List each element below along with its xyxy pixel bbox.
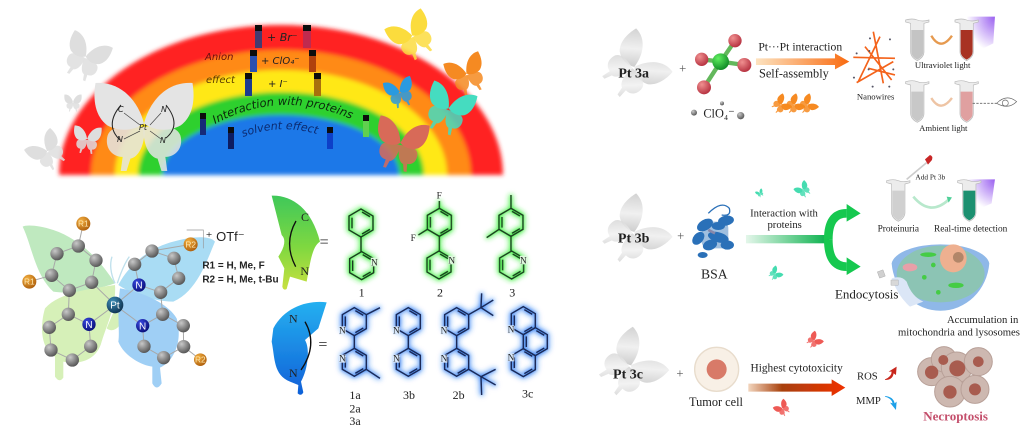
arrow labels: Pt···Pt interaction <box>758 41 842 54</box>
arrow labels <box>758 41 842 80</box>
rainbow arcs <box>59 25 503 175</box>
tube: proteinuria: Proteinuria <box>878 224 920 234</box>
substituent legend: R1 = H, Me, F <box>202 261 265 272</box>
ligand numbers <box>349 285 533 428</box>
perchlorate label: ClO₄⁻ <box>703 106 735 120</box>
tubes: ultraviolet light: Ultraviolet light <box>915 60 971 70</box>
plus sign: + <box>677 229 684 243</box>
BSA protein ribbon <box>690 205 735 258</box>
panel: Pt 3c pathway <box>589 326 992 423</box>
BSA label: BSA <box>701 266 728 281</box>
endocytosis label: Endocytosis <box>835 287 898 302</box>
butterfly: Pt complex: C <box>118 105 124 114</box>
counter-ion label: ⁺ OTf⁻ <box>206 229 245 244</box>
blue ligand atom labels <box>339 325 515 365</box>
substituent atoms: R1 <box>24 277 35 287</box>
nitrogen atoms <box>82 278 149 332</box>
butterfly: Pt 3a: Pt 3a <box>618 66 649 81</box>
interaction label <box>750 209 819 231</box>
green C^N wing <box>272 196 329 290</box>
panel: Pt 3b pathway <box>592 155 1020 339</box>
perchlorate label <box>691 101 744 120</box>
blue N^N wing: = <box>318 337 327 354</box>
tubes: ambient light <box>906 81 978 133</box>
substituent atoms: R2 <box>185 239 196 249</box>
rainbow labels: effect <box>206 75 236 86</box>
accumulation label: Accumulation in <box>947 315 1019 326</box>
substituent legend: R2 = H, Me, t-Bu <box>202 274 279 285</box>
arrow: red <box>748 379 845 396</box>
vials <box>200 25 369 149</box>
butterfly: Pt 3b <box>592 193 673 274</box>
green ligand atom labels <box>371 191 527 269</box>
ligand numbers: 3c <box>522 387 533 401</box>
panel: Pt 3a pathway <box>592 17 1017 133</box>
ligand numbers: 3a <box>349 414 361 428</box>
cytotoxicity label: Highest cytotoxicity <box>751 362 843 374</box>
green ligand atom labels: F <box>411 234 416 244</box>
arrow: forked green <box>746 204 861 275</box>
rainbow labels: + I⁻ <box>268 79 288 90</box>
blue ligand atom labels: N <box>339 326 346 336</box>
green ligand atom labels: N <box>448 257 455 267</box>
blue ligand atom labels: N <box>393 326 400 336</box>
counter-ion bracket <box>187 230 203 248</box>
blue ligand atom labels: N <box>393 355 400 365</box>
carbon atoms <box>43 239 190 367</box>
arrow labels: Self-assembly <box>759 66 830 80</box>
blue ligand atom labels: N <box>508 353 515 363</box>
rainbow labels: + Br⁻ <box>267 31 298 44</box>
ligand numbers: 2a <box>349 401 361 415</box>
ligand numbers: 3b <box>403 388 415 402</box>
green C^N wing: N <box>300 264 309 278</box>
butterfly: Pt 3c: Pt 3c <box>613 368 643 383</box>
green ligand atom labels: F <box>437 191 442 201</box>
blue N^N wing: N <box>289 311 298 325</box>
butterfly: Pt 3c <box>589 326 670 407</box>
tube: real-time detection <box>913 179 1008 234</box>
antennae <box>111 257 129 283</box>
blue ligands <box>342 293 547 395</box>
plus sign: + <box>679 62 686 76</box>
butterfly: Pt complex: Pt <box>139 123 148 132</box>
panel: ligand structures <box>272 191 547 428</box>
green C^N wing: = <box>320 234 329 251</box>
blue ligand atom labels: N <box>508 325 515 335</box>
panel: molecular butterfly structure <box>22 217 279 387</box>
panel: rainbow of effects <box>24 8 506 179</box>
tube: real-time detection: Real-time detection <box>934 224 1008 234</box>
tumor cell <box>689 347 744 409</box>
plus sign: + <box>676 366 684 380</box>
ROS indicator: ROS <box>857 372 878 383</box>
interaction label: proteins <box>767 220 802 231</box>
necroptotic cell cluster <box>918 347 992 407</box>
blue ligand atom labels: N <box>441 326 448 336</box>
interaction label: Interaction with <box>750 209 819 220</box>
green ligands <box>349 195 524 280</box>
butterflies: coloured flock <box>370 8 491 175</box>
blue wing <box>118 237 215 387</box>
butterfly: Pt complex: N <box>117 135 123 144</box>
blue ligand atom labels: N <box>339 355 346 365</box>
rainbow labels: Anion <box>204 52 233 63</box>
blue N^N wing: N <box>289 366 298 380</box>
tumor cell: Tumor cell <box>689 395 744 409</box>
butterflies: teal <box>755 180 813 283</box>
green wing <box>23 226 120 380</box>
butterflies: orange stack <box>769 93 819 117</box>
rainbow labels: Interaction with proteins <box>212 96 354 124</box>
perchlorate ball model <box>695 34 751 94</box>
platinum atom: Pt <box>110 301 120 312</box>
accumulation label <box>898 315 1020 339</box>
MMP indicator: MMP <box>856 396 881 407</box>
nitrogen atoms: N <box>85 320 93 331</box>
ligand numbers: 2b <box>453 388 465 402</box>
dropper: Add Pt 3b: Add Pt 3b <box>915 173 945 182</box>
rainbow labels: solvent effect <box>242 122 319 137</box>
substituent atoms: R2 <box>195 355 206 365</box>
butterfly: Pt complex: N <box>161 105 167 114</box>
tubes: ambient light: Ambient light <box>919 123 968 133</box>
necroptosis label: Necroptosis <box>923 408 988 423</box>
rainbow labels <box>204 31 354 137</box>
green ligand atom labels: N <box>371 259 378 269</box>
ligand numbers: 1 <box>359 285 365 299</box>
ligand numbers: 3 <box>509 285 515 299</box>
tube: proteinuria <box>878 180 920 234</box>
nitrogen atoms: N <box>139 321 146 332</box>
butterfly: Pt 3b: Pt 3b <box>618 232 650 247</box>
arrow: self-assembly <box>756 53 849 69</box>
blue N^N wing <box>272 302 327 395</box>
butterflies: grey flock <box>24 30 113 176</box>
nanowires: Nanowires <box>857 91 895 101</box>
butterflies: red <box>773 331 824 419</box>
MMP indicator <box>856 396 897 410</box>
platinum atom <box>107 297 123 313</box>
dropper: Add Pt 3b <box>907 155 945 182</box>
cell with organelles <box>877 244 989 311</box>
nanowires <box>853 32 895 101</box>
green C^N wing: C <box>301 210 309 224</box>
blue ligand atom labels: N <box>441 355 448 365</box>
rainbow labels: + ClO₄⁻ <box>261 56 299 67</box>
ligand numbers: 1a <box>349 388 361 402</box>
bonds <box>29 224 200 360</box>
tubes: ultraviolet light <box>906 17 995 70</box>
butterfly: Pt complex: N <box>160 136 166 145</box>
ligand numbers: 2 <box>437 285 443 299</box>
butterfly: Pt 3a <box>592 28 673 109</box>
nitrogen atoms: N <box>135 281 143 292</box>
butterfly: Pt complex <box>94 83 194 171</box>
substituent atoms <box>22 217 207 366</box>
green ligand atom labels: N <box>520 257 527 267</box>
substituent atoms: R1 <box>78 219 89 229</box>
accumulation label: mitochondria and lysosomes <box>898 328 1020 339</box>
ROS indicator <box>857 367 897 383</box>
icon: eye with dashed sight line <box>973 98 1017 106</box>
substituent legend <box>202 261 279 285</box>
